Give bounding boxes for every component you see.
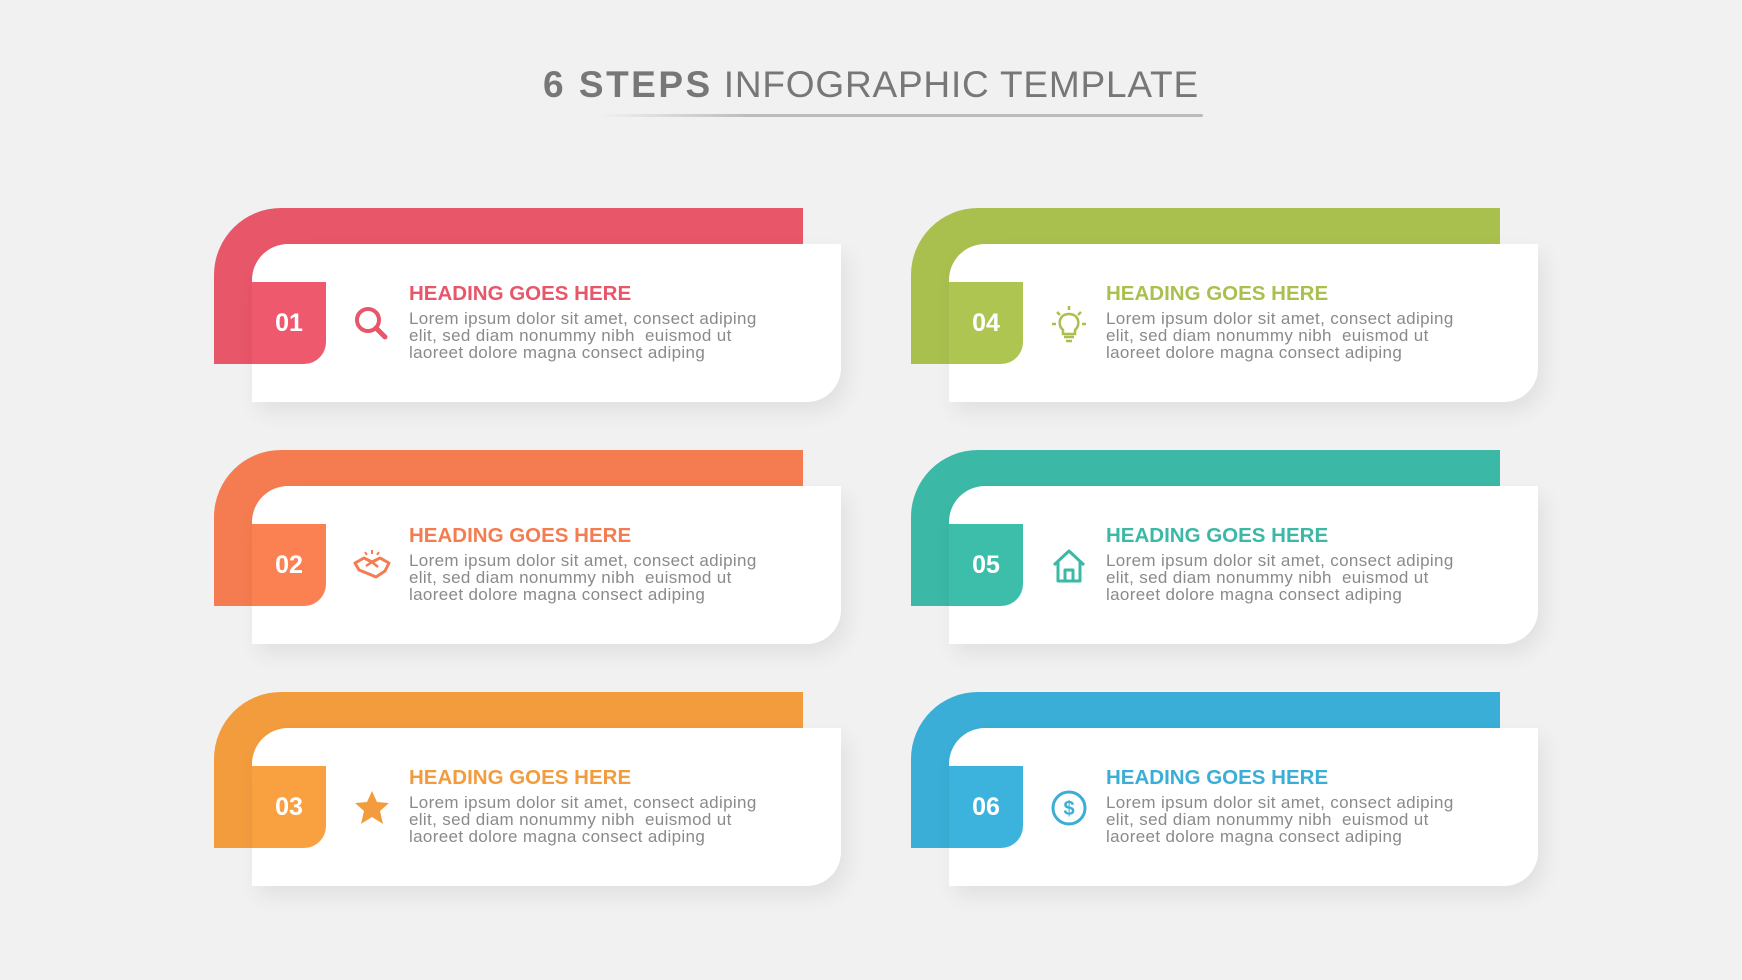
step 04: 04 <box>972 308 1000 336</box>
step 03: laoreet dolore magna consect adiping <box>409 827 705 846</box>
step 01: Lorem ipsum dolor sit amet, consect adiping <box>409 309 757 328</box>
title: 6 STEPS INFOGRAPHIC TEMPLATE <box>543 64 1199 105</box>
icon: handshake <box>353 550 390 578</box>
step 06: Lorem ipsum dolor sit amet, consect adiping <box>1106 793 1454 812</box>
step 06: elit, sed diam nonummy nibh euismod ut <box>1106 810 1429 829</box>
step 02: HEADING GOES HERE <box>409 524 631 547</box>
step 04 <box>911 208 1544 412</box>
step 04: laoreet dolore magna consect adiping <box>1106 343 1402 362</box>
step 05: laoreet dolore magna consect adiping <box>1106 585 1402 604</box>
step 01: laoreet dolore magna consect adiping <box>409 343 705 362</box>
step 02: 02 <box>275 550 303 578</box>
step 01 <box>214 208 847 412</box>
step 03 <box>214 692 847 896</box>
step 03: 03 <box>275 792 303 820</box>
step 04: Lorem ipsum dolor sit amet, consect adiping <box>1106 309 1454 328</box>
step 02: Lorem ipsum dolor sit amet, consect adiping <box>409 551 757 570</box>
step 01: HEADING GOES HERE <box>409 282 631 305</box>
step 04: HEADING GOES HERE <box>1106 282 1328 305</box>
icon: dollar coin <box>1052 790 1086 826</box>
icon: house <box>1053 549 1085 582</box>
step 03: elit, sed diam nonummy nibh euismod ut <box>409 810 732 829</box>
step 02 <box>214 450 847 654</box>
icon: star <box>355 791 389 824</box>
icon: lightbulb <box>1052 306 1086 342</box>
step 06: laoreet dolore magna consect adiping <box>1106 827 1402 846</box>
step 06 <box>911 692 1544 896</box>
step 01: 01 <box>275 308 303 336</box>
step 05 <box>911 450 1544 654</box>
icon: dollar coin: $ <box>1063 798 1075 820</box>
step 05: Lorem ipsum dolor sit amet, consect adiping <box>1106 551 1454 570</box>
step 06: 06 <box>972 792 1000 820</box>
icon: magnifier <box>355 307 388 340</box>
step 02: laoreet dolore magna consect adiping <box>409 585 705 604</box>
title underline <box>600 114 1203 117</box>
step 02: elit, sed diam nonummy nibh euismod ut <box>409 568 732 587</box>
step 06: HEADING GOES HERE <box>1106 766 1328 789</box>
step 05: HEADING GOES HERE <box>1106 524 1328 547</box>
step 03: HEADING GOES HERE <box>409 766 631 789</box>
step 05: elit, sed diam nonummy nibh euismod ut <box>1106 568 1429 587</box>
step 01: elit, sed diam nonummy nibh euismod ut <box>409 326 732 345</box>
step 04: elit, sed diam nonummy nibh euismod ut <box>1106 326 1429 345</box>
step 03: Lorem ipsum dolor sit amet, consect adiping <box>409 793 757 812</box>
step 05: 05 <box>972 550 1000 578</box>
